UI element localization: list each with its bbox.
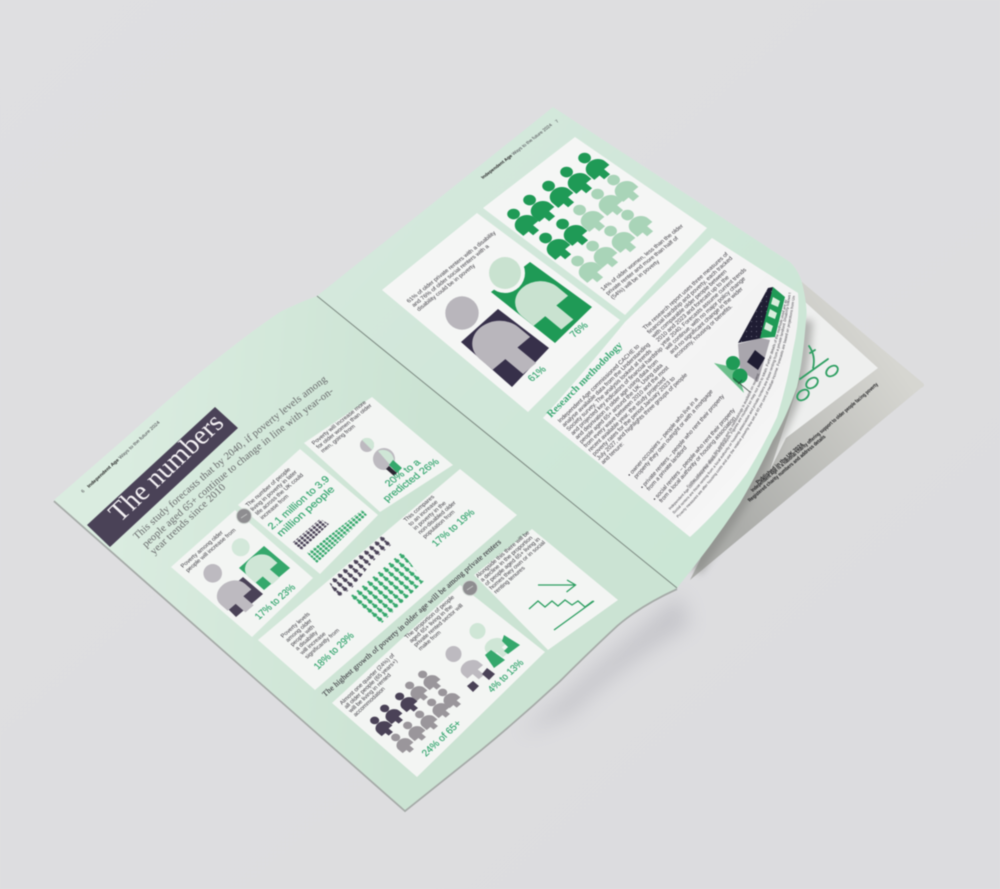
pictogram: grey and dark people [365,667,465,756]
intro paragraph: people aged 65+ continue to change in line with year-on- [142,390,333,550]
panel text: for older women than older [316,403,374,450]
footnote text following the curve: Independent Age commissioned the research and analysis. Figures are rounded so may not sum to totals. Further details of the methods used are available in the full technical report published alongside this summary document online for readers. [668,299,788,510]
footnote text following the curve: Social renters are those renting from a local authority or housing association and private renters are those renting from a private landlord. Disability follows the definition in official household surveys and older people are those aged 65 and over. [672,292,792,514]
stat: 4% to 13%: 4% to 13% [486,658,526,695]
back page text lines: Independent Age is a national charity offering support to older people facing poverty [750,382,880,493]
panel: private renters 24% of 65+ and 4% to 13% [332,585,545,777]
panel: alongside this, decline in owning homes [474,528,618,650]
panel text: increase from [259,494,291,521]
panel: 61% and 76% of renters with a disability [382,213,620,412]
bullet list of tenure groups: property they own outright or with a mortgage [633,389,714,480]
panel text: the proportion: The proportion of people [404,595,456,640]
right page running header: 7 [554,119,560,124]
body text column one: poverty rates for the period January 2023 to [592,376,677,458]
footnote text following the curve: Poverty measures are after housing costs and use the relative poverty line set at 60 per cent of median income. Forecasts are based on projections from Understanding Society data and assume trends since 2010 continue over the period to 2040. [676,295,796,518]
body text column two: financial hardship and poverty, each tracked [646,256,734,335]
panel text: this compares: population from [422,510,457,540]
panel text: poverty levels: significantly from [304,628,341,660]
heading: highest growth of poverty among private renters: The highest growth of poverty in older age will be among private renters [321,540,502,697]
body text column one: Society survey. The analysis looked at trends [566,349,653,433]
intro paragraph: This study forecasts that by 2040, if poverty levels among [132,376,328,539]
icon: link chip 1 [236,508,252,524]
panel text: people will increase from [185,528,238,574]
bullet list of tenure groups: • social renters – people who rent their property [652,407,737,503]
panel: pictogram of older women [483,137,707,315]
panel text: private renter and more than half of [605,236,680,296]
back page text lines [747,382,880,503]
icon: two people 4% to 13% [446,623,520,692]
body text column one: people aged 65+ around the UK. Using data [579,362,665,445]
panel text: men, going from [320,424,357,454]
footnote text following the curve [668,292,796,518]
icon: arrow [538,580,576,592]
stat: 24% of 65+: 24% of 65+ [420,718,464,759]
right page running header: Independent Age Ways to the future 2024 [480,122,554,180]
pictogram: dark and green people [329,535,424,624]
bullet list of tenure groups: from a local authority or housing association [659,416,737,504]
body text column one: Independent Age commissioned CACHE to [557,344,641,424]
panel text: poverty levels: will increase [299,631,328,657]
panel: disability poverty 18% to 29%, and 17% to 19% [258,469,517,690]
panel text: poverty levels: Poverty levels [280,612,312,639]
left page running header: Independent Age Ways to the future 2024 [86,420,161,489]
body text column one: from every wave between 2010 and the most [583,365,671,449]
soft shadow under brochure [520,595,690,735]
panel text: (54%) will be in poverty [610,259,661,301]
panel text: this compares: non-disabled older [417,500,458,536]
body text column one: and tenure: [600,441,626,466]
illustration: house and trees [714,287,785,393]
intro paragraph: year trends since 2010 [148,482,228,557]
spine fold line [317,296,677,588]
body text column two: will continue, with no major policy change [663,276,747,352]
left page edge thickness [54,501,677,811]
panel text: and 76% of older social renters with a [411,244,492,308]
footnote text following the curve: Further information about this analysis and its methodology is available on request. [686,373,760,488]
stat: 17% to 19%: 17% to 19% [430,508,478,549]
back page text lines: Registered charity numbers and address details [747,434,828,503]
body text column one: analyse available data from the Understanding [561,342,652,429]
body text column two: 2010 and 2023 and forecast up to the [655,275,731,343]
body text column two: year 2040. Forecasts assume current trends [660,267,748,347]
panel text: the proportion: make from [418,630,443,652]
body text column two: and no significant change in the wider [669,287,745,355]
body text column one: recent available year, the study projected [587,377,667,453]
panel text: renting tenures [493,566,527,595]
panel text: life across the UK could [255,473,305,517]
bullet list of tenure groups: from a private landlord [646,445,688,492]
body text column two: with comparable older people between [650,269,729,340]
back page white panel [770,300,878,470]
stat: 2.1 million to 3.9 million people: million people [275,484,338,539]
panel text: Poverty will increase more [311,400,368,446]
panel text: The number of people [245,467,292,508]
panel text: this compares: in poverty in the [412,501,448,532]
stat: 76%: 76% [568,321,591,340]
panel text: poverty levels: people with [290,625,316,648]
heading: research methodology: Research methodology [545,340,626,420]
panel text: this compares: This compares [403,494,436,523]
panel text: almost one quarter: accommodation [353,686,387,718]
panel text: Poverty among older [180,530,225,569]
left page running header: 6 [80,488,86,494]
panel text: this compares: to an increase [408,500,440,527]
panel text: a decline in the proportion [480,536,534,583]
stat: 20% to a predicted 26%: 20% to a [383,457,424,489]
panel text: living in poverty in later [250,470,299,513]
body text column one: and projected key indicators of financial hardship [570,346,664,437]
icon: grey person on dark box [445,296,549,387]
body text column two: The research report uses three measures of [642,252,730,331]
panel text: Alongside this there will be [475,530,531,579]
back page revealed under the curl [690,272,924,580]
left page [54,296,676,810]
pictogram: dark and green small people [292,510,367,563]
panel text: the proportion: aged 65+ living in the [409,604,455,644]
stat: 18% to 29%: 18% to 29% [312,631,357,672]
icon: descending stairs [529,600,594,630]
icon: person half grey half green [360,438,402,476]
body text column one: and deprivation in older age using data from [574,359,660,441]
body text column two: economy, housing or benefits. [673,304,735,359]
panel text: 14% of older women, less than the older [600,224,685,292]
panel text: almost one quarter: Almost one quarter (24%) of [339,653,397,706]
panel text: of people aged 65+ living in [484,537,542,587]
bullet list of tenure groups: • owner-occupiers – people who live in a [627,396,700,478]
stat: 61%: 61% [526,365,549,384]
title band: The numbers: The numbers [102,408,230,528]
panel text: disability could be in poverty [416,263,477,313]
panel text: almost one quarter: all older people (65 years+) [344,658,399,710]
panel: poverty among older people 17% to 23% [171,510,313,637]
back page text lines: Published in the UK 2024 [755,442,805,485]
icon: green tree and circles on back page [795,346,840,403]
stat: 17% to 23%: 17% to 23% [253,583,298,622]
panel text: poverty levels: a disability [294,630,320,652]
right page with curled edge [318,108,807,587]
stat: 2.1 million to 3.9 million people: 2.1 million to 3.9 [266,474,333,532]
back page shadow from curl [695,320,806,570]
panel: older women 20% to a predicted 26% [304,397,453,512]
icon: light person on green box [485,253,592,343]
panel text: almost one quarter: will be living in rented [347,673,393,715]
stat: 20% to a predicted 26%: predicted 26% [381,457,442,504]
panel text: homes they own or in social [489,540,547,591]
pictogram: dark green people [501,147,615,264]
panel text: the proportion: private rented sector will [413,603,465,648]
panel text: poverty levels: among older [285,618,314,644]
panel: people in poverty 2.1 to 3.9 million [238,449,378,574]
bullet list of tenure groups: • private renters – people who rent their property [640,394,726,491]
pictogram: light green people [565,169,658,287]
panel: research methodology [543,238,799,537]
panel text: 61% of older private renters with a disability [406,231,498,304]
icon: two people comparison [203,538,290,619]
icon: link chip 2 [462,580,478,596]
body text column one: July 2027, and highlights three groups of people [596,373,689,462]
